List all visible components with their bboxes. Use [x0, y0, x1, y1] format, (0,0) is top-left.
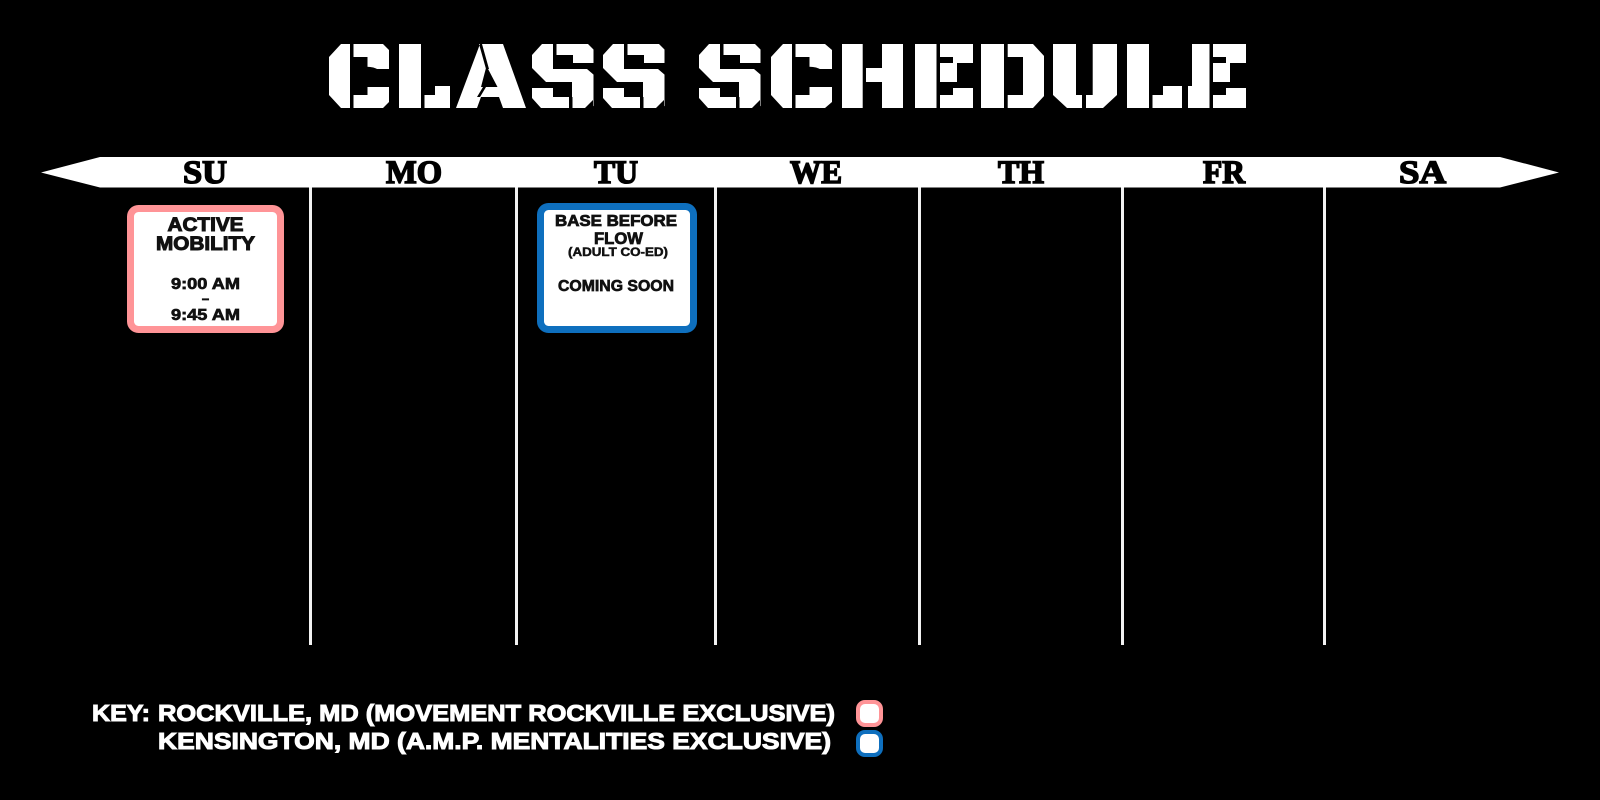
day labels: TH	[998, 155, 1044, 191]
class card: Base Before Flow: FLOW	[594, 229, 644, 248]
title	[329, 44, 1246, 108]
title: L	[396, 34, 458, 124]
day labels: TU	[594, 155, 638, 191]
swatch: Rockville	[858, 702, 881, 725]
title: A	[453, 34, 529, 124]
title: E	[1185, 34, 1249, 124]
key label: KEY:	[92, 700, 150, 726]
day labels: SU	[183, 155, 227, 191]
class card: Base Before Flow: BASE BEFORE	[555, 213, 677, 230]
class card: Active Mobility: –	[202, 291, 209, 306]
title: S	[696, 34, 763, 124]
title: D	[978, 34, 1047, 124]
day labels	[183, 155, 1446, 191]
class card: Base Before Flow: COMING SOON	[558, 278, 674, 295]
day labels: WE	[790, 155, 842, 191]
class card: Active Mobility	[130, 208, 280, 330]
day labels: FR	[1203, 155, 1246, 191]
title: S	[600, 34, 667, 124]
vertical column dividers	[309, 187, 1326, 645]
key row: Kensington: KENSINGTON, MD (A.M.P. MENTALITIES EXCLUSIVE)	[158, 728, 831, 754]
swatch: Kensington	[858, 732, 881, 755]
title: E	[912, 34, 976, 124]
day labels: SA	[1399, 155, 1446, 191]
class card: Active Mobility: ACTIVE	[168, 215, 244, 236]
key legend	[92, 700, 881, 755]
key row: Rockville: ROCKVILLE, MD (MOVEMENT ROCKVILLE EXCLUSIVE)	[158, 700, 835, 726]
title: H	[839, 34, 906, 124]
class card: Active Mobility: 9:00 AM	[171, 276, 240, 293]
title: C	[326, 34, 392, 124]
title: L	[1124, 34, 1186, 124]
title: U	[1050, 34, 1120, 124]
class card: Active Mobility: 9:45 AM	[171, 307, 240, 324]
title: S	[529, 34, 596, 124]
day header arrow bar	[41, 157, 1559, 188]
day labels: MO	[386, 155, 442, 191]
title: C	[768, 34, 835, 124]
class card: Active Mobility: MOBILITY	[156, 234, 255, 255]
class card: Base Before Flow: (ADULT CO-ED)	[568, 245, 668, 259]
class card: Base Before Flow	[540, 206, 694, 330]
